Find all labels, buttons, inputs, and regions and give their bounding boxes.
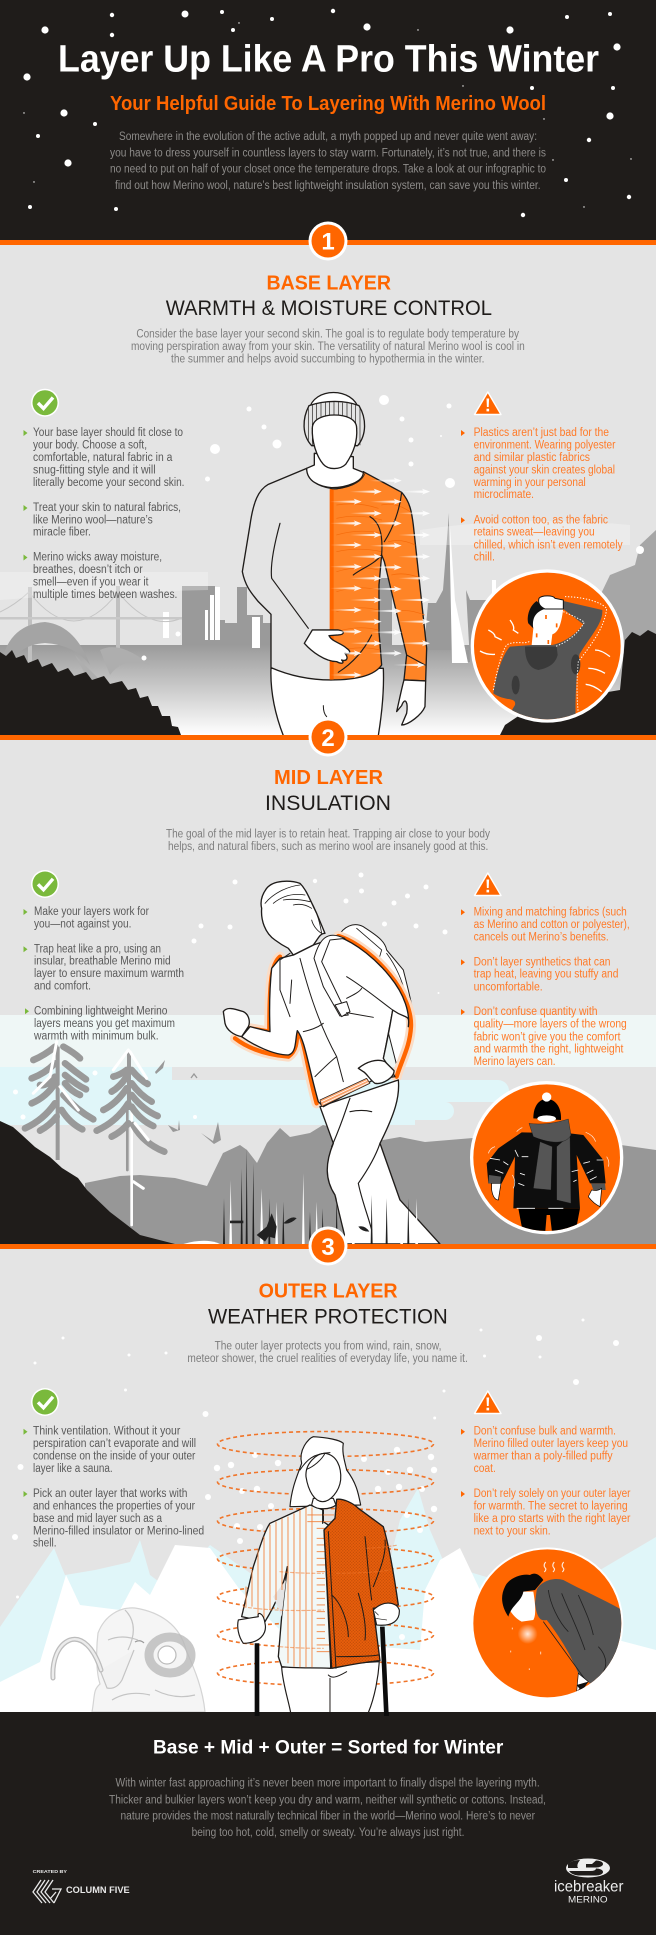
footer text: nature provides the most naturally technical fiber in the world—Merino wool. Here’s to never (120, 1811, 535, 1823)
text: base layer don'ts: and similar plastic fabrics (474, 452, 590, 464)
intro text (110, 131, 546, 192)
vignette: overheating man (472, 571, 622, 722)
vignette: overdressed person (472, 1083, 622, 1235)
text: base layer don'ts: chilled, which isn’t even remotely (474, 539, 623, 551)
icon: check mark (31, 870, 59, 898)
heading: base layer: WARMTH & MOISTURE CONTROL (166, 297, 492, 320)
text: base layer don'ts: chill. (474, 552, 495, 564)
section number 3: 3 (321, 1234, 335, 1261)
intro text: you have to dress yourself in countless layers to stay warm. Fortunately, it’s not true, and there is (110, 147, 546, 159)
text: mid layer don'ts: quality—more layers of the wrong (474, 1019, 627, 1031)
scene: dark bushes right (500, 630, 656, 735)
scene: snowy peaks (0, 1488, 656, 1712)
text: base layer don'ts: Plastics aren’t just bad for the (474, 427, 609, 439)
text: base layer don'ts: Avoid cotton too, as the fabric (474, 514, 608, 526)
text: outer layer don'ts: like a pro starts with the right layer (474, 1513, 631, 1525)
text: outer layer dos (24, 1426, 204, 1550)
text: mid layer dos: Make your layers work for (34, 906, 149, 918)
text: outer layer don'ts: Don’t rely solely on your outer layer (474, 1488, 631, 1500)
text: base layer dos: miracle fiber. (33, 527, 91, 539)
scene: city skyline with bridge (0, 513, 656, 735)
text: mid layer don'ts: Don’t layer synthetics that can (474, 956, 610, 968)
intro text: Somewhere in the evolution of the active adult, a myth popped up and never quite went away: (119, 131, 537, 143)
text: base layer dos: Treat your skin to natural fabrics, (33, 502, 181, 514)
text: mid layer don'ts (461, 906, 630, 1068)
subtitle: Your Helpful Guide To Layering With Merino Wool (110, 93, 546, 115)
dashed air rings (back) (218, 1432, 434, 1686)
text: mid layer dos: layers means you get maximum (34, 1018, 175, 1030)
text: outer layer description: The outer layer protects you from wind, rain, snow, (215, 1340, 441, 1352)
text: mid layer dos: and comfort. (34, 981, 91, 993)
text: base layer don'ts: retains sweat—leaving you (474, 527, 595, 539)
text: mid layer description: helps, and natural fibers, such as merino wool are insanely good at this. (168, 841, 488, 853)
panel: header background (0, 0, 656, 242)
text: outer layer don'ts: coat. (474, 1463, 496, 1475)
heading: outer layer: OUTER LAYER (259, 1280, 398, 1302)
footer text: Thicker and bulkier layers won’t keep you dry and warm, neither will synthetic or cottons. Instead, (109, 1794, 546, 1806)
text: base layer description: Consider the base layer your second skin. The goal is to regulate body temperature by (136, 328, 519, 340)
text: base layer don'ts: against your skin creates global (474, 464, 615, 476)
heading: outer layer: WEATHER PROTECTION (208, 1305, 448, 1328)
figure: hiker in outer layer (238, 1437, 399, 1713)
text: outer layer dos: condense on the inside of your outer (33, 1451, 196, 1463)
section number 1 (0, 222, 656, 260)
section number 1: 1 (321, 228, 335, 256)
heading: outer layer (208, 1280, 448, 1328)
text: outer layer don'ts: Merino filled outer layers keep you (474, 1438, 628, 1450)
text: mid layer dos: warmth with minimum bulk. (33, 1030, 159, 1042)
text: outer layer description (187, 1340, 468, 1365)
text: mid layer don'ts: and warmth the right, lightweight (474, 1044, 624, 1056)
text: mid layer don'ts: uncomfortable. (474, 981, 543, 993)
text: base layer dos: Your base layer should fit close to (33, 427, 183, 439)
text: base layer don'ts: warming in your personal (473, 477, 586, 489)
icon: warning triangle (474, 392, 501, 414)
snowfall: mid layer (13, 872, 448, 1120)
text: base layer dos: multiple times between washes. (33, 589, 177, 601)
vignette: sweating person (472, 1548, 625, 1698)
text: outer layer don'ts: next to your skin. (474, 1525, 551, 1537)
text: mid layer don'ts: fabric won’t give you the comfort (474, 1031, 621, 1043)
heading: mid layer: INSULATION (265, 792, 391, 815)
scene: mountains, haze and trees (0, 1015, 656, 1244)
text: base layer don'ts (461, 427, 623, 564)
text: mid layer don'ts: Merino layers can. (474, 1056, 556, 1068)
pole tips (255, 1712, 389, 1716)
text: base layer dos: snug-fitting style and it will (33, 464, 156, 476)
text: outer layer dos: and enhances the properties of your (33, 1500, 195, 1512)
text: outer layer don'ts: for warmth. The secret to layering (474, 1500, 628, 1512)
text: base layer dos: breathes, doesn’t itch or (33, 564, 143, 576)
text: outer layer dos: Merino-filled insulator or Merino-lined (33, 1525, 204, 1537)
snowfall: outer layer (12, 1318, 619, 1640)
text: mid layer description: The goal of the mid layer is to retain heat. Trapping air close to your body (166, 828, 490, 840)
text: outer layer dos: base and mid layer such as a (33, 1513, 163, 1525)
text: base layer dos: your body. Choose a soft, (33, 440, 147, 452)
snowfall: header (23, 9, 632, 217)
icon: check mark (31, 389, 59, 417)
text: base layer dos: Merino wicks away moisture, (33, 552, 162, 564)
icon: warning triangle (474, 873, 501, 896)
text: base layer description: moving perspiration away from your skin. The versatility of natural Merino wool is cool in (131, 341, 525, 353)
text: base layer don'ts: environment. Wearing polyester (474, 440, 616, 452)
text: outer layer dos: perspiration can’t evaporate and will (33, 1438, 196, 1450)
text: base layer description: the summer and helps avoid succumbing to hypothermia in the winter. (171, 353, 484, 365)
title: Layer Up Like A Pro This Winter (58, 38, 599, 80)
text: outer layer dos: layer like a sauna. (33, 1463, 113, 1475)
text: mid layer dos: Combining lightweight Merino (34, 1005, 167, 1017)
logo: icebreaker merino (554, 1858, 624, 1905)
footer text (109, 1778, 546, 1839)
heading: mid layer: MID LAYER (274, 767, 384, 789)
text: base layer dos: smell—even if you wear it (33, 577, 149, 589)
illustration: ram (53, 1608, 205, 1712)
icon: warning triangle (474, 1391, 501, 1414)
text: outer layer dos: Pick an outer layer that works with (33, 1488, 187, 1500)
text: mid layer dos: insular, breathable Merino mid (34, 956, 171, 968)
text: outer layer don'ts (461, 1426, 631, 1537)
panel: section backgrounds (0, 242, 656, 1712)
logo: icebreaker merino: icebreaker (554, 1879, 624, 1896)
text: outer layer don'ts: warmer than a poly-filled puffy (473, 1451, 613, 1463)
text: outer layer description: meteor shower, the cruel realities of everyday life, you name it. (187, 1353, 468, 1365)
text: outer layer dos: Think ventilation. Without it your (33, 1426, 180, 1438)
logo: Column Five: CREATED BY (33, 1869, 67, 1874)
footer heading: Base + Mid + Outer = Sorted for Winter (153, 1737, 504, 1758)
text: mid layer dos (24, 906, 184, 1042)
text: mid layer description (166, 828, 490, 853)
text: mid layer dos: you—not against you. (34, 919, 131, 931)
logo: Column Five: COLUMN FIVE (66, 1885, 130, 1896)
grass (183, 1148, 418, 1244)
scene: dark bushes left (0, 650, 181, 735)
panel: footer background (0, 1712, 656, 1935)
intro text: find out how Merino wool, nature’s best lightweight insulation system, can save you this winter. (115, 180, 541, 192)
figure: man in base layer (242, 392, 430, 736)
heading: base layer: BASE LAYER (266, 272, 392, 294)
text: base layer description (131, 328, 525, 365)
heading: base layer (166, 272, 492, 320)
logo: icebreaker merino: MERINO (568, 1894, 608, 1905)
text: mid layer don'ts: Don’t confuse quantity with (474, 1006, 598, 1018)
text: outer layer don'ts: Don’t confuse bulk and warmth. (474, 1426, 616, 1438)
arrows: moisture wicking (330, 478, 430, 678)
text: base layer dos: comfortable, natural fabric in a (33, 452, 173, 464)
heading: mid layer (265, 767, 391, 815)
text: mid layer don'ts: Mixing and matching fabrics (such (474, 906, 627, 918)
figure: hiker in mid layer (183, 881, 440, 1244)
text: mid layer don'ts: as Merino and cotton or polyester), (474, 919, 630, 931)
text: mid layer don'ts: trap heat, leaving you stuffy and (474, 969, 618, 981)
logo: Column Five (33, 1869, 130, 1903)
text: mid layer dos: layer to ensure maximum warmth (34, 968, 184, 980)
intro text: no need to put on half of your closet once the temperature drops. Take a look at our infographic to (110, 164, 546, 176)
text: base layer don'ts: microclimate. (474, 489, 534, 501)
text: base layer dos (24, 427, 184, 601)
section number 3 (0, 1226, 656, 1266)
text: base layer dos: like Merino wool—nature’s (33, 514, 153, 526)
section number 2: 2 (321, 725, 335, 752)
text: mid layer dos: Trap heat like a pro, using an (34, 943, 161, 955)
section number 2 (0, 718, 656, 756)
footer text: With winter fast approaching it’s never been more important to finally dispel the layering myth. (116, 1778, 540, 1790)
text: mid layer don'ts: cancels out Merino’s benefits. (474, 931, 609, 943)
icon: check mark (31, 1388, 59, 1416)
snowfall: base layer (142, 395, 644, 660)
text: base layer dos: literally become your second skin. (33, 477, 184, 489)
footer text: being too hot, cold, smelly or sweaty. You’re always just right. (192, 1827, 464, 1839)
text: outer layer dos: shell. (33, 1538, 56, 1550)
